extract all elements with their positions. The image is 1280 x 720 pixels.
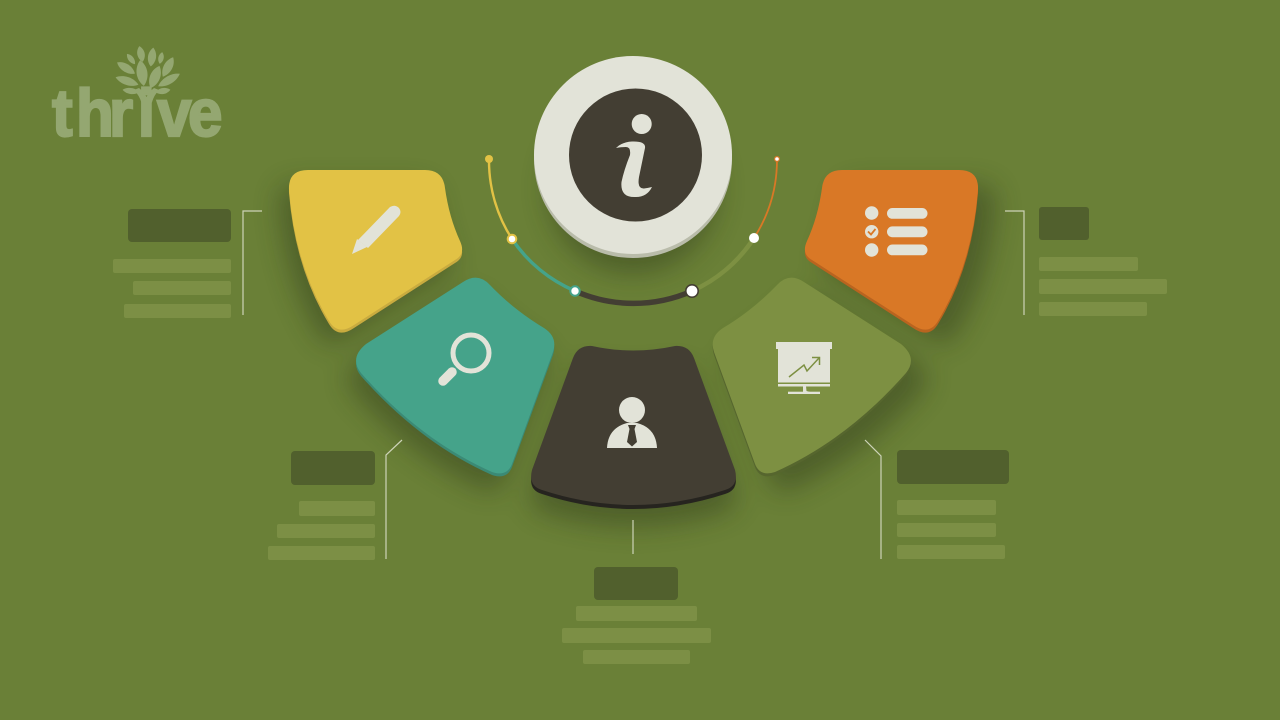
panel: orange checklist [805, 170, 978, 333]
callout: orange text placeholder [1005, 207, 1167, 316]
center info badge [534, 56, 732, 258]
icon: italic i [616, 114, 652, 197]
logo wordmark: thrive [52, 76, 222, 151]
arc connector [489, 160, 777, 303]
arc segment: dark [575, 291, 692, 303]
panel: dark person [531, 346, 736, 509]
arc segment: teal [512, 239, 575, 291]
logo: thrive [52, 45, 222, 151]
shadows under the panels [279, 102, 996, 527]
arc segment: orange [754, 160, 777, 238]
icon: person with tie [607, 397, 657, 448]
callout: teal text placeholder [268, 440, 402, 560]
panel: yellow pencil [289, 170, 462, 333]
panel: teal magnifier [356, 278, 554, 476]
callout: green text placeholder [865, 440, 1009, 559]
logo tree [114, 45, 182, 136]
panel: green presentation [713, 278, 911, 476]
icon: presentation screen [776, 342, 832, 394]
arc segment: green [692, 238, 754, 291]
callout: dark text placeholder [562, 520, 711, 664]
icon: pencil [352, 206, 400, 254]
icon: checklist [865, 206, 928, 257]
arc segment: yellow [489, 160, 512, 239]
arc nodes [485, 155, 779, 297]
callout: yellow text placeholder [113, 209, 262, 318]
icon: magnifier [443, 335, 489, 381]
